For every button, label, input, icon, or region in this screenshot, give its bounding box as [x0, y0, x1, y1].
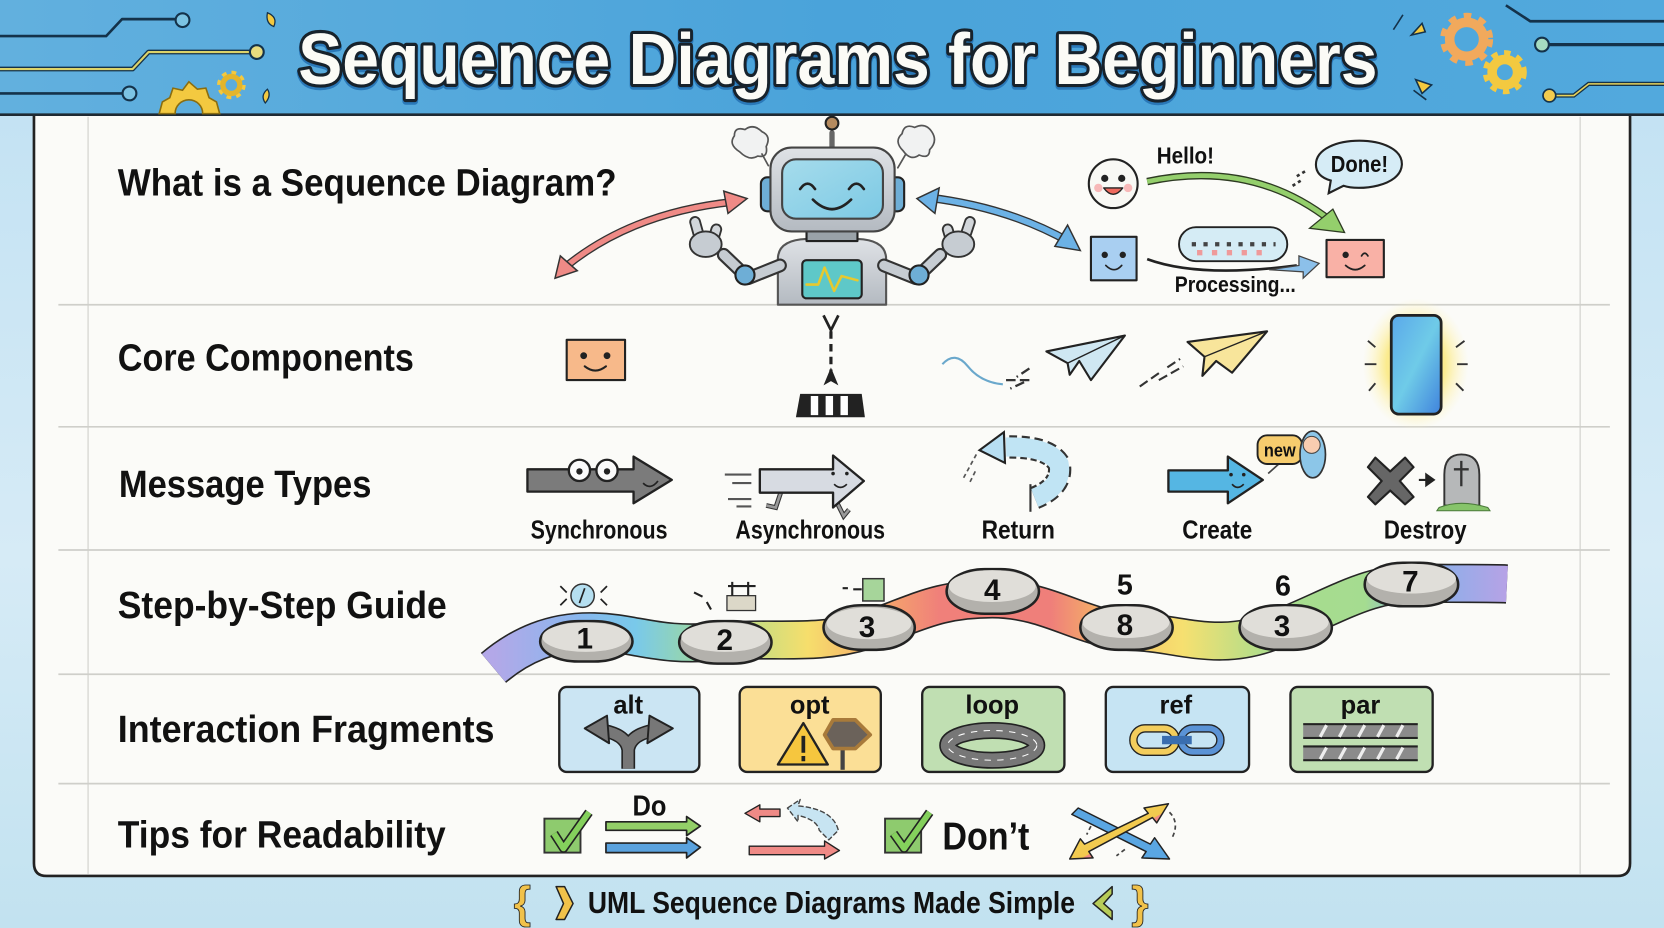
tip label: do: Do [632, 790, 666, 822]
core component: blue paper plane [942, 336, 1125, 389]
stone 1: 1 [576, 623, 593, 656]
actor: blue square [1091, 237, 1137, 280]
message: return [964, 432, 1060, 544]
step number 5: 5 [1117, 570, 1133, 602]
icon: chain link [1133, 728, 1176, 752]
icon: right brace: } [1131, 878, 1149, 927]
arrow: green [1147, 176, 1345, 233]
circuit traces: left [0, 13, 264, 100]
heading: tips for readability: Tips for Readability [118, 813, 446, 856]
icon: signpost [841, 749, 845, 770]
stone 3: 3 [859, 611, 875, 644]
stone 8: 8 [1117, 609, 1133, 642]
fragment: alt: alt [613, 692, 644, 720]
gears: right [1393, 15, 1524, 100]
panel: main paper sheet [34, 115, 1630, 876]
fragment: ref [1106, 687, 1249, 772]
label: Asynchronous [735, 516, 885, 544]
tip: do check [544, 812, 589, 853]
fragment: par [1290, 687, 1433, 772]
icon: steam clouds [732, 126, 934, 168]
label: Return [982, 516, 1055, 544]
ears [761, 177, 776, 211]
tip: tangled return arrows [745, 800, 839, 859]
step number 6: 6 [1275, 571, 1291, 603]
sequence mini-diagram [1089, 141, 1402, 297]
hand: left [690, 222, 722, 257]
title text: Sequence Diagrams for Beginners [298, 20, 1377, 100]
tip: don't check [885, 812, 930, 853]
arrow: red double-headed [555, 191, 747, 278]
tip label: don't: Don’t [942, 814, 1029, 858]
heading: interaction fragments: Interaction Fragments [118, 708, 495, 751]
chest screen [802, 260, 862, 298]
icon: forked road [603, 731, 654, 769]
footer tagline [514, 878, 1149, 927]
arrow: processing [1147, 256, 1319, 278]
capsule: processing [1179, 227, 1287, 261]
heading: step-by-step guide: Step-by-Step Guide [118, 584, 447, 627]
fragment: loop: loop [965, 692, 1019, 720]
arrow: blue double-headed [917, 188, 1080, 251]
stone 8 [1080, 605, 1173, 650]
actor: pink box [1327, 240, 1384, 277]
robot mascot [690, 117, 974, 305]
tip: good parallel arrows [606, 817, 700, 858]
stone 3b: 3 [1274, 610, 1290, 643]
message: create: new [1264, 441, 1297, 461]
stone 4 [947, 569, 1039, 614]
arms [724, 255, 780, 278]
body [778, 239, 886, 305]
fragment: par: par [1341, 692, 1380, 720]
head [770, 148, 895, 231]
heading: what is a sequence diagram: What is a Sequence Diagram? [118, 161, 617, 204]
speech bubble: done [1293, 141, 1402, 193]
message: destroy [1368, 454, 1490, 544]
stone 2: 2 [717, 624, 733, 657]
speech bubble: done: Done! [1331, 151, 1388, 177]
stone 7 [1365, 563, 1458, 606]
heading: core components: Core Components [118, 337, 414, 380]
icon: step 2 [694, 582, 756, 611]
fragment: alt [559, 687, 699, 772]
stone 1 [540, 621, 632, 661]
fragment: opt [740, 687, 881, 772]
stone 3 [824, 605, 915, 650]
tip: crossed arrows [1070, 804, 1175, 859]
icon: step 3 [843, 579, 884, 601]
circuit traces: right [1506, 5, 1664, 102]
label: Destroy [1384, 516, 1467, 544]
stone 3b [1240, 605, 1332, 650]
heading: message types: Message Types [119, 463, 371, 506]
icon: left brace: { [514, 878, 531, 927]
label: Create [1182, 516, 1252, 544]
core component: yellow paper plane [1140, 331, 1267, 386]
actor: smiling circle [1089, 159, 1138, 208]
fragment: ref: ref [1160, 692, 1193, 720]
message: asynchronous [725, 456, 885, 544]
step guide: rainbow path [493, 563, 1507, 668]
icon: step 1 [560, 584, 607, 607]
title shadow: Sequence Diagrams for Beginners [298, 22, 1377, 102]
stone 2 [679, 621, 772, 664]
face [800, 184, 864, 209]
fragment: loop [922, 687, 1064, 772]
icon: parallel tracks [1303, 725, 1418, 737]
icon: left chevron [556, 887, 573, 920]
core component: lifeline [796, 315, 865, 417]
label: processing: Processing... [1175, 272, 1296, 297]
stone 7: 7 [1402, 565, 1419, 598]
label: hello: Hello! [1157, 143, 1214, 169]
icon: ring road [948, 731, 1037, 760]
stone 4: 4 [984, 574, 1001, 607]
header banner [0, 0, 1664, 115]
message: create [1168, 431, 1325, 544]
footer text: UML Sequence Diagrams Made Simple [588, 885, 1075, 920]
icon: right chevron [1093, 887, 1112, 920]
message: synchronous [527, 457, 672, 544]
fragment: opt: opt [790, 692, 830, 720]
gears: left yellow [159, 13, 275, 114]
core component: actor box [567, 340, 625, 380]
hand: right [942, 222, 974, 257]
icon: warning sign [778, 723, 828, 764]
label: Synchronous [531, 516, 668, 544]
antenna [830, 133, 834, 151]
core component: activation bar [1363, 298, 1469, 430]
